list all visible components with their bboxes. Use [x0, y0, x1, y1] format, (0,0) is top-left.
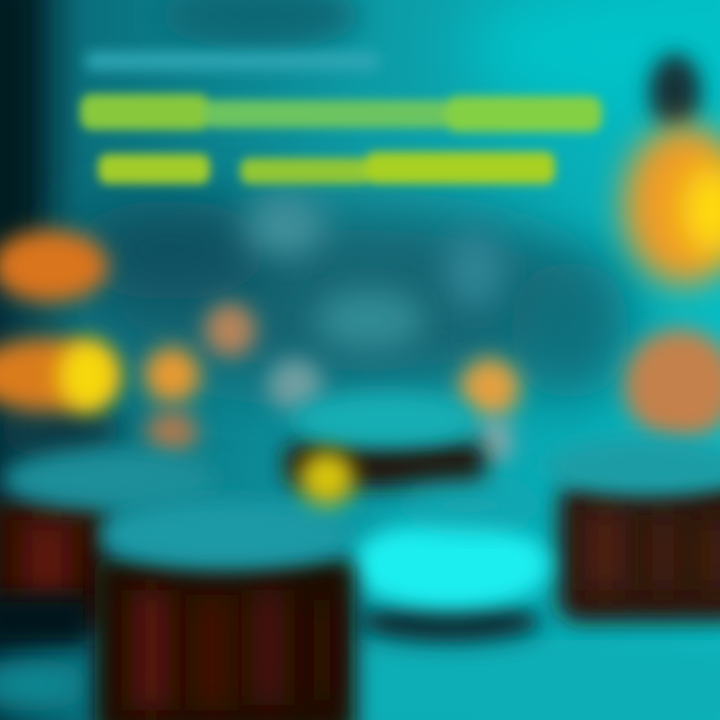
icon: yellow coin — [299, 451, 355, 505]
bottom floor — [0, 640, 720, 720]
title — [80, 94, 602, 184]
drum: left back — [0, 450, 218, 645]
drum: right — [545, 436, 720, 622]
drum: centre back — [285, 393, 485, 488]
drum: bright cyan centre — [350, 485, 550, 642]
centre lantern — [460, 358, 520, 464]
subtitle — [85, 52, 380, 70]
hanging lantern — [623, 54, 720, 285]
right lantern — [624, 329, 720, 441]
drum: front left — [95, 500, 355, 720]
left lanterns — [0, 230, 323, 454]
